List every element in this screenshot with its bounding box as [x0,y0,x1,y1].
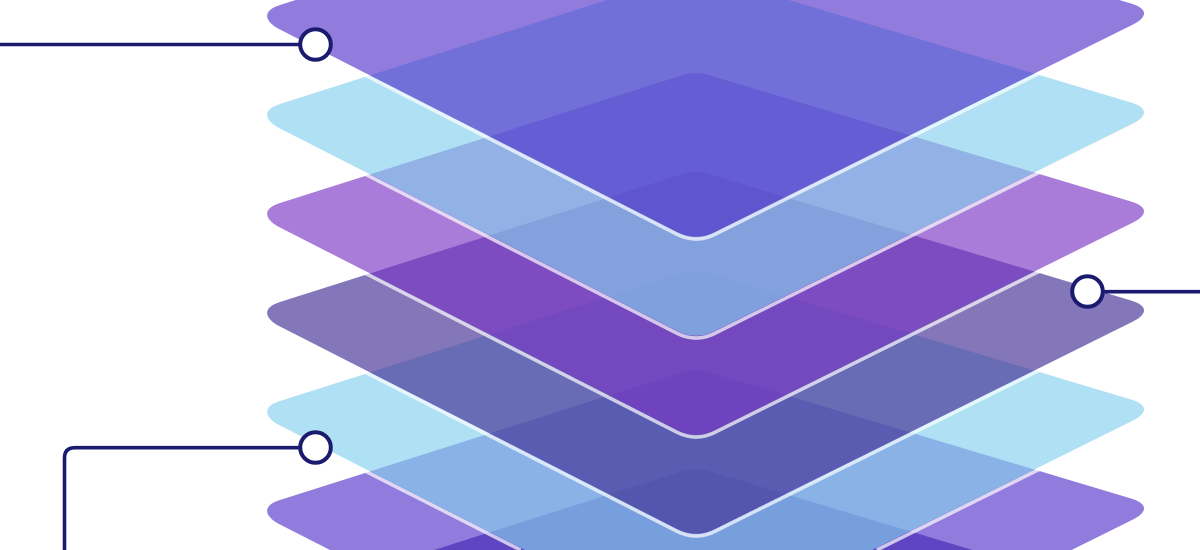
layer 2 [267,0,1144,338]
connector: middle right [1072,276,1200,307]
layer 5 [267,271,1144,550]
connector: top left [0,29,331,60]
layer 7 [434,469,972,550]
layer stack [267,0,1144,550]
layer 6 [267,370,1144,550]
layer 4 [267,172,1144,536]
connector: bottom left [64,432,331,550]
layer 3 [267,73,1144,437]
layer 1 [267,0,1144,239]
